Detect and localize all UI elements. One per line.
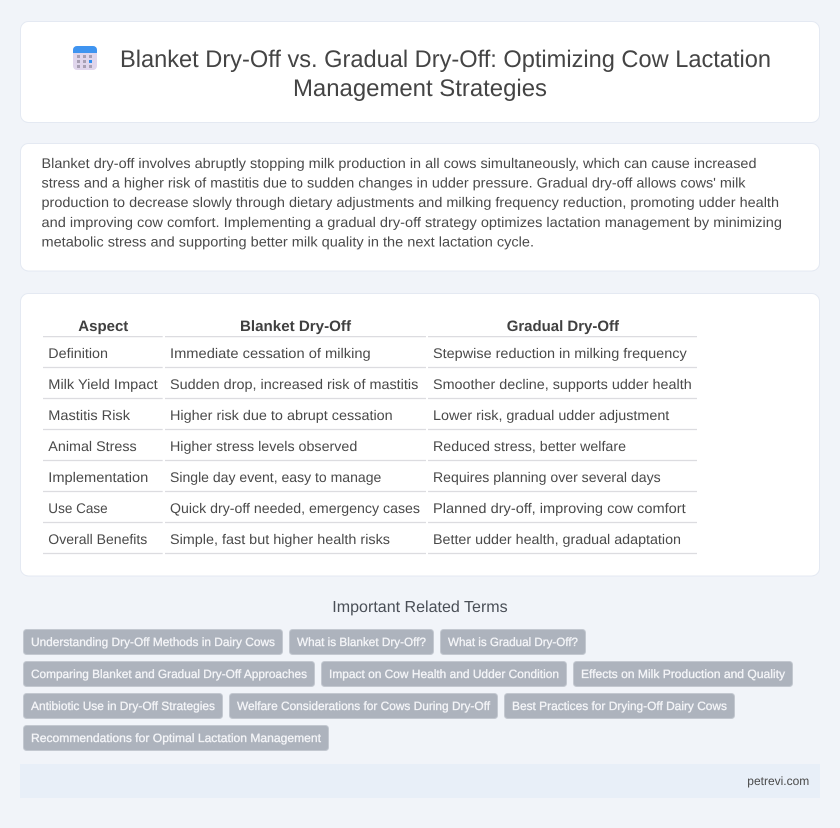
table header: Gradual Dry-Off <box>507 318 620 335</box>
table row: overall benefits: Simple, fast but higher health risks <box>170 531 390 547</box>
text block: summary paragraph: production to decrease slowly through dietary adjustments and milking frequency reduction, promoting udder health <box>42 194 779 210</box>
tag: Understanding Dry-Off Methods in Dairy Cows <box>31 635 275 649</box>
panel: summary <box>20 144 820 271</box>
tag: Best Practices for Drying-Off Dairy Cows <box>512 699 727 713</box>
panel: related term tags <box>24 630 792 750</box>
tag <box>440 630 586 654</box>
table row: definition: Definition <box>48 345 108 361</box>
footer <box>20 764 820 798</box>
tag <box>322 662 566 686</box>
tag: What is Blanket Dry-Off? <box>297 635 426 649</box>
table row: use case: Quick dry-off needed, emergency cases <box>170 500 420 516</box>
table row: overall benefits: Better udder health, gradual adaptation <box>433 531 681 547</box>
table row: definition: Immediate cessation of milking <box>170 345 371 361</box>
tag: What is Gradual Dry-Off? <box>448 635 578 649</box>
table header: Aspect <box>78 318 128 335</box>
tag: Impact on Cow Health and Udder Condition <box>329 667 559 681</box>
table row: definition <box>48 345 687 361</box>
table row: implementation: Implementation <box>48 469 148 485</box>
table row: use case <box>48 500 686 516</box>
table row: implementation: Single day event, easy to manage <box>170 469 382 485</box>
tag: Recommendations for Optimal Lactation Management <box>31 731 322 745</box>
table header: Blanket Dry-Off <box>240 318 352 335</box>
table row: milk yield impact <box>48 376 692 392</box>
table row: milk yield impact: Milk Yield Impact <box>48 376 158 392</box>
panel: header <box>20 22 820 122</box>
text block: summary paragraph: stress and a higher risk of mastitis due to sudden changes in udder pressure. Gradual dry-off allows cows' milk <box>42 175 747 191</box>
heading: important related terms: Important Related Terms <box>332 599 508 616</box>
text block: summary paragraph: Blanket dry-off involves abruptly stopping milk production in all cows simultaneously, which can cause increased <box>42 155 756 171</box>
title: Blanket Dry-Off vs. Gradual Dry-Off: Optimizing Cow Lactation <box>120 46 771 73</box>
table row: overall benefits: Overall Benefits <box>48 531 147 547</box>
table row: animal stress: Animal Stress <box>48 438 137 454</box>
table row: use case: Use Case <box>48 500 108 516</box>
table row: mastitis risk: Higher risk due to abrupt cessation <box>170 407 393 423</box>
table row: milk yield impact: Smoother decline, supports udder health <box>433 376 692 392</box>
footer source: petrevi.com <box>747 774 809 788</box>
tag: Welfare Considerations for Cows During Dry-Off <box>237 699 491 713</box>
icon: calendar <box>73 46 97 70</box>
table row: animal stress <box>48 438 626 454</box>
tag <box>24 726 328 750</box>
tag: Effects on Milk Production and Quality <box>581 667 785 681</box>
tag: Comparing Blanket and Gradual Dry-Off Approaches <box>31 667 307 681</box>
tag <box>230 694 498 718</box>
text block: summary paragraph: and improving cow comfort. Implementing a gradual dry-off strategy optimizes lactation management by minimizing <box>42 214 782 230</box>
tag <box>504 694 734 718</box>
table row: implementation <box>48 469 661 485</box>
tag <box>24 630 282 654</box>
tag <box>574 662 792 686</box>
tag <box>290 630 434 654</box>
table row: animal stress: Reduced stress, better welfare <box>433 438 626 454</box>
table row: definition: Stepwise reduction in milking frequency <box>433 345 687 361</box>
table row: overall benefits <box>48 531 681 547</box>
tag: Antibiotic Use in Dry-Off Strategies <box>31 699 215 713</box>
table row: milk yield impact: Sudden drop, increased risk of mastitis <box>170 376 418 392</box>
tag <box>24 662 314 686</box>
title: Management Strategies <box>293 75 547 102</box>
panel: comparison table <box>20 294 820 576</box>
table row: animal stress: Higher stress levels observed <box>170 438 357 454</box>
text block: summary paragraph <box>42 155 782 249</box>
table row: mastitis risk: Lower risk, gradual udder adjustment <box>433 407 669 423</box>
table row: use case: Planned dry-off, improving cow comfort <box>433 500 686 516</box>
table row: mastitis risk <box>48 407 669 423</box>
table header <box>78 318 620 335</box>
text block: summary paragraph: metabolic stress and supporting better milk quality in the next lactation cycle. <box>42 233 534 249</box>
table row: implementation: Requires planning over several days <box>433 469 661 485</box>
title <box>120 46 771 102</box>
table row: mastitis risk: Mastitis Risk <box>48 407 131 423</box>
tag <box>24 694 222 718</box>
